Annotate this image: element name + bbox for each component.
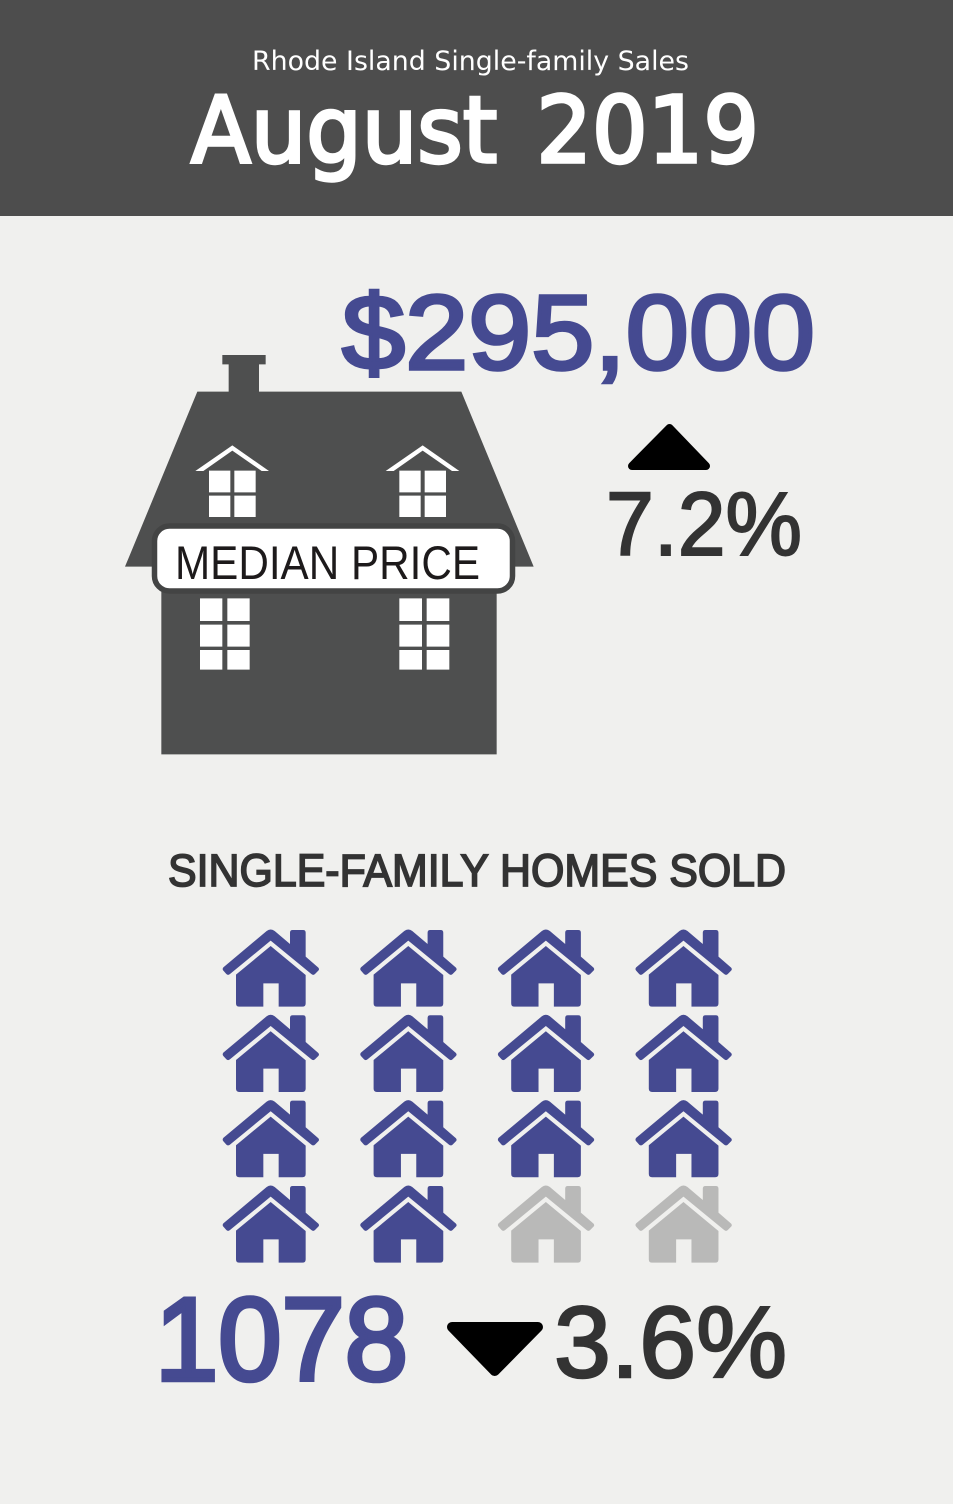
pictogram: homes sold (223, 929, 732, 1263)
title: August 2019 (191, 77, 759, 184)
subtitle: Rhode Island Single-family Sales (252, 46, 689, 77)
sales change: 3.6% (554, 1287, 787, 1399)
median price value: $295,000 (342, 274, 815, 392)
icon: median price house (125, 355, 534, 754)
header band (0, 0, 953, 216)
homes sold heading: SINGLE-FAMILY HOMES SOLD (168, 845, 786, 896)
price change: 7.2% (606, 475, 802, 575)
icon: up arrow (632, 428, 706, 466)
icon: down arrow (452, 1327, 538, 1371)
median price label: MEDIAN PRICE (175, 536, 480, 589)
homes sold value: 1078 (155, 1274, 408, 1406)
